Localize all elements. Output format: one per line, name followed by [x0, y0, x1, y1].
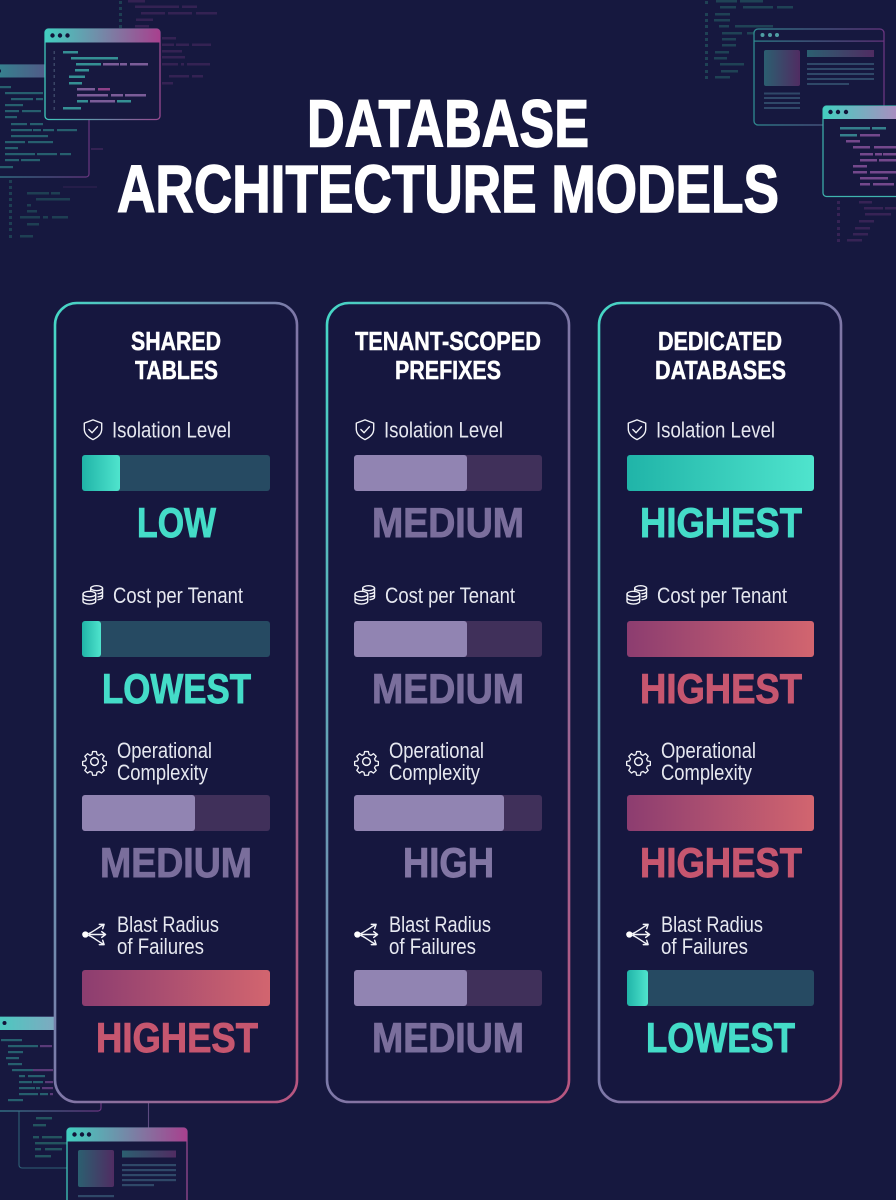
heading: tenant-scoped prefixes: TENANT-SCOPED [355, 326, 541, 356]
metric: operational complexity high [354, 738, 542, 886]
window: code editor, top right [823, 106, 896, 196]
metric: isolation level medium: Isolation Level [384, 418, 503, 442]
title: DATABASE [307, 86, 589, 162]
metric: isolation level low: Isolation Level [112, 418, 231, 442]
metric: blast radius medium: of Failures [389, 934, 476, 959]
code decoration: top left background [9, 0, 217, 238]
metric: operational complexity medium [82, 738, 270, 886]
heading: shared tables: TABLES [135, 355, 218, 385]
metric: cost per tenant lowest: Cost per Tenant [113, 583, 243, 608]
window: outline behind, bottom left [19, 1100, 148, 1168]
metric: blast radius highest: of Failures [117, 934, 204, 959]
metric: isolation level highest [627, 418, 814, 546]
metric: cost per tenant medium: Cost per Tenant [385, 583, 515, 608]
metric: operational complexity highest [627, 738, 814, 886]
heading: dedicated databases: DATABASES [655, 355, 786, 385]
heading: shared tables [131, 326, 221, 385]
metric: operational complexity high: Operational [389, 738, 484, 763]
heading: tenant-scoped prefixes: PREFIXES [395, 355, 501, 385]
panel: tenant-scoped prefixes [327, 303, 569, 1102]
metric: operational complexity medium: Complexity [117, 760, 208, 785]
metric: operational complexity medium: MEDIUM [100, 839, 252, 886]
metric: cost per tenant medium [354, 583, 542, 712]
metric: operational complexity highest: Complexity [661, 760, 752, 785]
metric: blast radius medium: MEDIUM [372, 1014, 524, 1061]
metric: blast radius lowest: LOWEST [646, 1014, 795, 1061]
metric: isolation level highest: HIGHEST [640, 499, 802, 546]
heading: dedicated databases [655, 326, 786, 385]
metric: cost per tenant lowest: LOWEST [102, 665, 251, 712]
metric: operational complexity highest: Operational [661, 738, 756, 763]
metric: cost per tenant lowest [82, 583, 270, 712]
metric: isolation level low [82, 418, 270, 546]
panel: shared tables [55, 303, 297, 1102]
metric: blast radius lowest [626, 912, 814, 1061]
metric: operational complexity high: Complexity [389, 760, 480, 785]
metric: blast radius medium [354, 912, 542, 1061]
title [117, 86, 779, 227]
code decoration: top right background [705, 0, 896, 242]
window: code editor behind, top left [0, 65, 89, 177]
window: code editor, bottom left [0, 1017, 101, 1111]
metric: blast radius medium: Blast Radius [389, 912, 491, 937]
metric: blast radius highest: Blast Radius [117, 912, 219, 937]
metric: blast radius lowest: of Failures [661, 934, 748, 959]
window: web page outline, top right [754, 29, 884, 125]
metric: isolation level low: LOW [137, 499, 216, 546]
metric: blast radius lowest: Blast Radius [661, 912, 763, 937]
metric: blast radius highest: HIGHEST [96, 1014, 258, 1061]
window: web page, bottom left [67, 1128, 187, 1200]
metric: operational complexity high: HIGH [403, 839, 494, 886]
heading: shared tables: SHARED [131, 326, 221, 356]
metric: isolation level medium [354, 418, 542, 546]
metric: cost per tenant highest: HIGHEST [640, 665, 802, 712]
heading: tenant-scoped prefixes [355, 326, 541, 385]
metric: operational complexity highest: HIGHEST [640, 839, 802, 886]
panel: dedicated databases [599, 303, 841, 1102]
heading: dedicated databases: DEDICATED [658, 326, 782, 356]
metric: cost per tenant highest [627, 583, 814, 712]
metric: cost per tenant medium: MEDIUM [372, 665, 524, 712]
metric: isolation level medium: MEDIUM [372, 499, 524, 546]
metric: isolation level highest: Isolation Level [656, 418, 775, 442]
metric: operational complexity medium: Operational [117, 738, 212, 763]
metric: blast radius highest [82, 912, 270, 1061]
metric: cost per tenant highest: Cost per Tenant [657, 583, 787, 608]
window: code editor front, top left [45, 29, 160, 120]
